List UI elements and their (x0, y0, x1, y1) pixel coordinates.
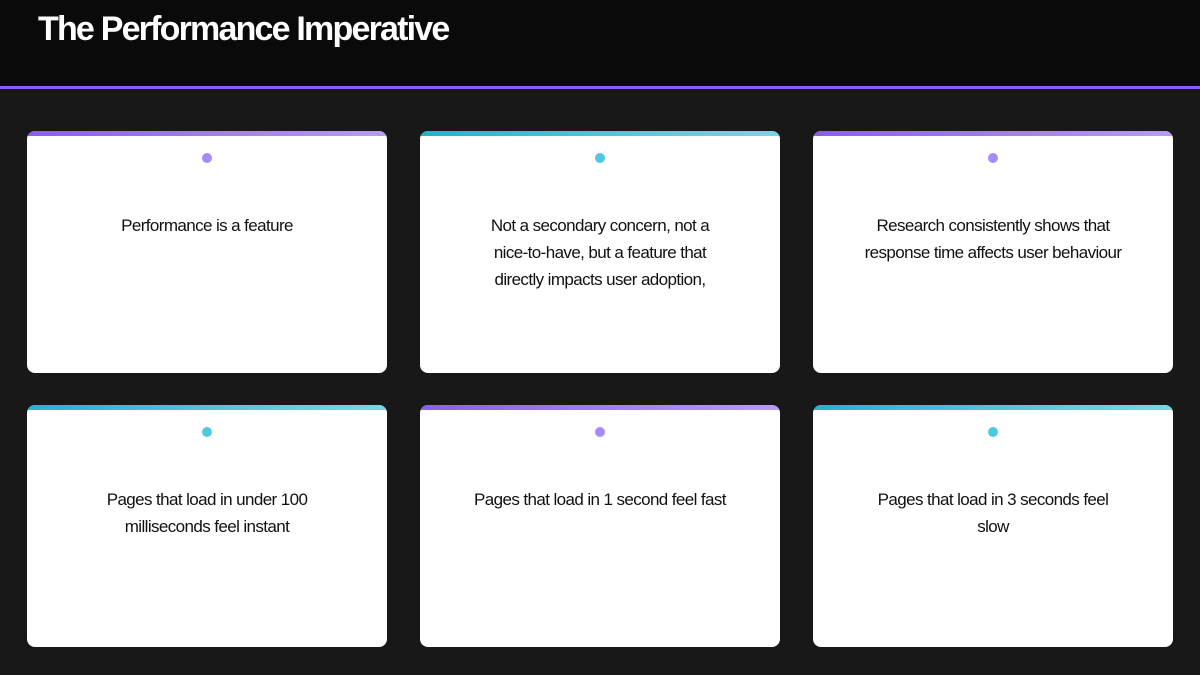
icon: dot (202, 153, 212, 163)
icon: dot (202, 427, 212, 437)
icon: dot (595, 427, 605, 437)
card 2 (420, 131, 780, 373)
card 1 (27, 131, 387, 373)
text: Pages that load in under 100 milliseconds feel instant (107, 490, 307, 536)
header (0, 0, 1200, 89)
icon: dot (988, 153, 998, 163)
text: Research consistently shows that response time affects user behaviour (865, 216, 1121, 262)
icon: dot (988, 427, 998, 437)
text: Not a secondary concern, not a nice-to-have, but a feature that directly impacts user adoption, (491, 216, 709, 289)
card 4 (27, 405, 387, 647)
text: Pages that load in 1 second feel fast (474, 490, 726, 509)
card 5 (420, 405, 780, 647)
title: The Performance Imperative (38, 10, 448, 48)
card 6 (813, 405, 1173, 647)
text: Pages that load in 3 seconds feel slow (878, 490, 1108, 536)
text: Performance is a feature (121, 216, 293, 235)
icon: dot (595, 153, 605, 163)
card 3 (813, 131, 1173, 373)
